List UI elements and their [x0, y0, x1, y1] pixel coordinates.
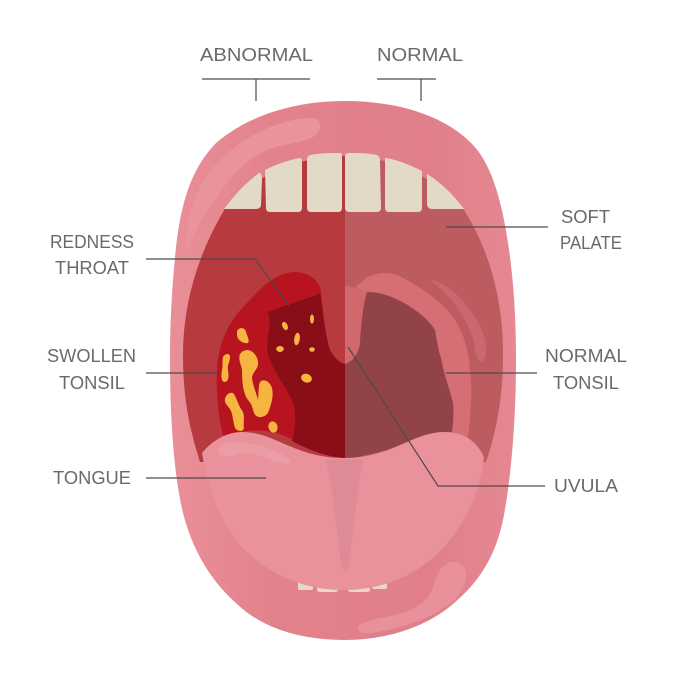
- throat: abnormal half: [183, 156, 345, 462]
- label: uvula: UVULA: [554, 476, 618, 496]
- label: redness throat: REDNESS: [50, 232, 134, 252]
- dark recess: [345, 292, 453, 460]
- throat: normal half: [345, 156, 503, 462]
- pink arch: [345, 273, 471, 445]
- label: abnormal: ABNORMAL: [200, 45, 313, 65]
- tongue midline groove: [326, 459, 363, 570]
- label: soft palate: PALATE: [560, 233, 622, 253]
- tongue highlight: [218, 442, 291, 464]
- label: soft palate: SOFT: [561, 207, 610, 227]
- lips: [170, 101, 516, 640]
- teeth: [224, 153, 464, 212]
- outer faint arch: [430, 280, 486, 362]
- mouth illustration: [170, 101, 516, 640]
- label: normal tonsil: TONSIL: [553, 373, 619, 393]
- label: swollen tonsil: TONSIL: [59, 373, 125, 393]
- highlight: lower lip: [358, 562, 466, 633]
- abnormal tonsil: [217, 272, 345, 458]
- highlight: upper lip: [185, 118, 320, 250]
- label: swollen tonsil: [47, 346, 136, 393]
- label: tongue: TONGUE: [53, 468, 131, 488]
- pus spots: [221, 314, 315, 434]
- label: swollen tonsil: SWOLLEN: [47, 346, 136, 366]
- label: normal: NORMAL: [377, 45, 463, 65]
- label: normal tonsil: NORMAL: [545, 346, 627, 366]
- normal tonsil: [345, 273, 486, 460]
- lower teeth: [298, 578, 387, 592]
- label: soft palate: [560, 207, 622, 253]
- pointer lines: [146, 79, 548, 486]
- uvula right side: [345, 285, 367, 364]
- tongue: [202, 432, 484, 590]
- label: normal tonsil: [545, 346, 627, 393]
- label: redness throat: [50, 232, 134, 278]
- dark inflamed area: [267, 293, 345, 458]
- label: redness throat: THROAT: [55, 258, 129, 278]
